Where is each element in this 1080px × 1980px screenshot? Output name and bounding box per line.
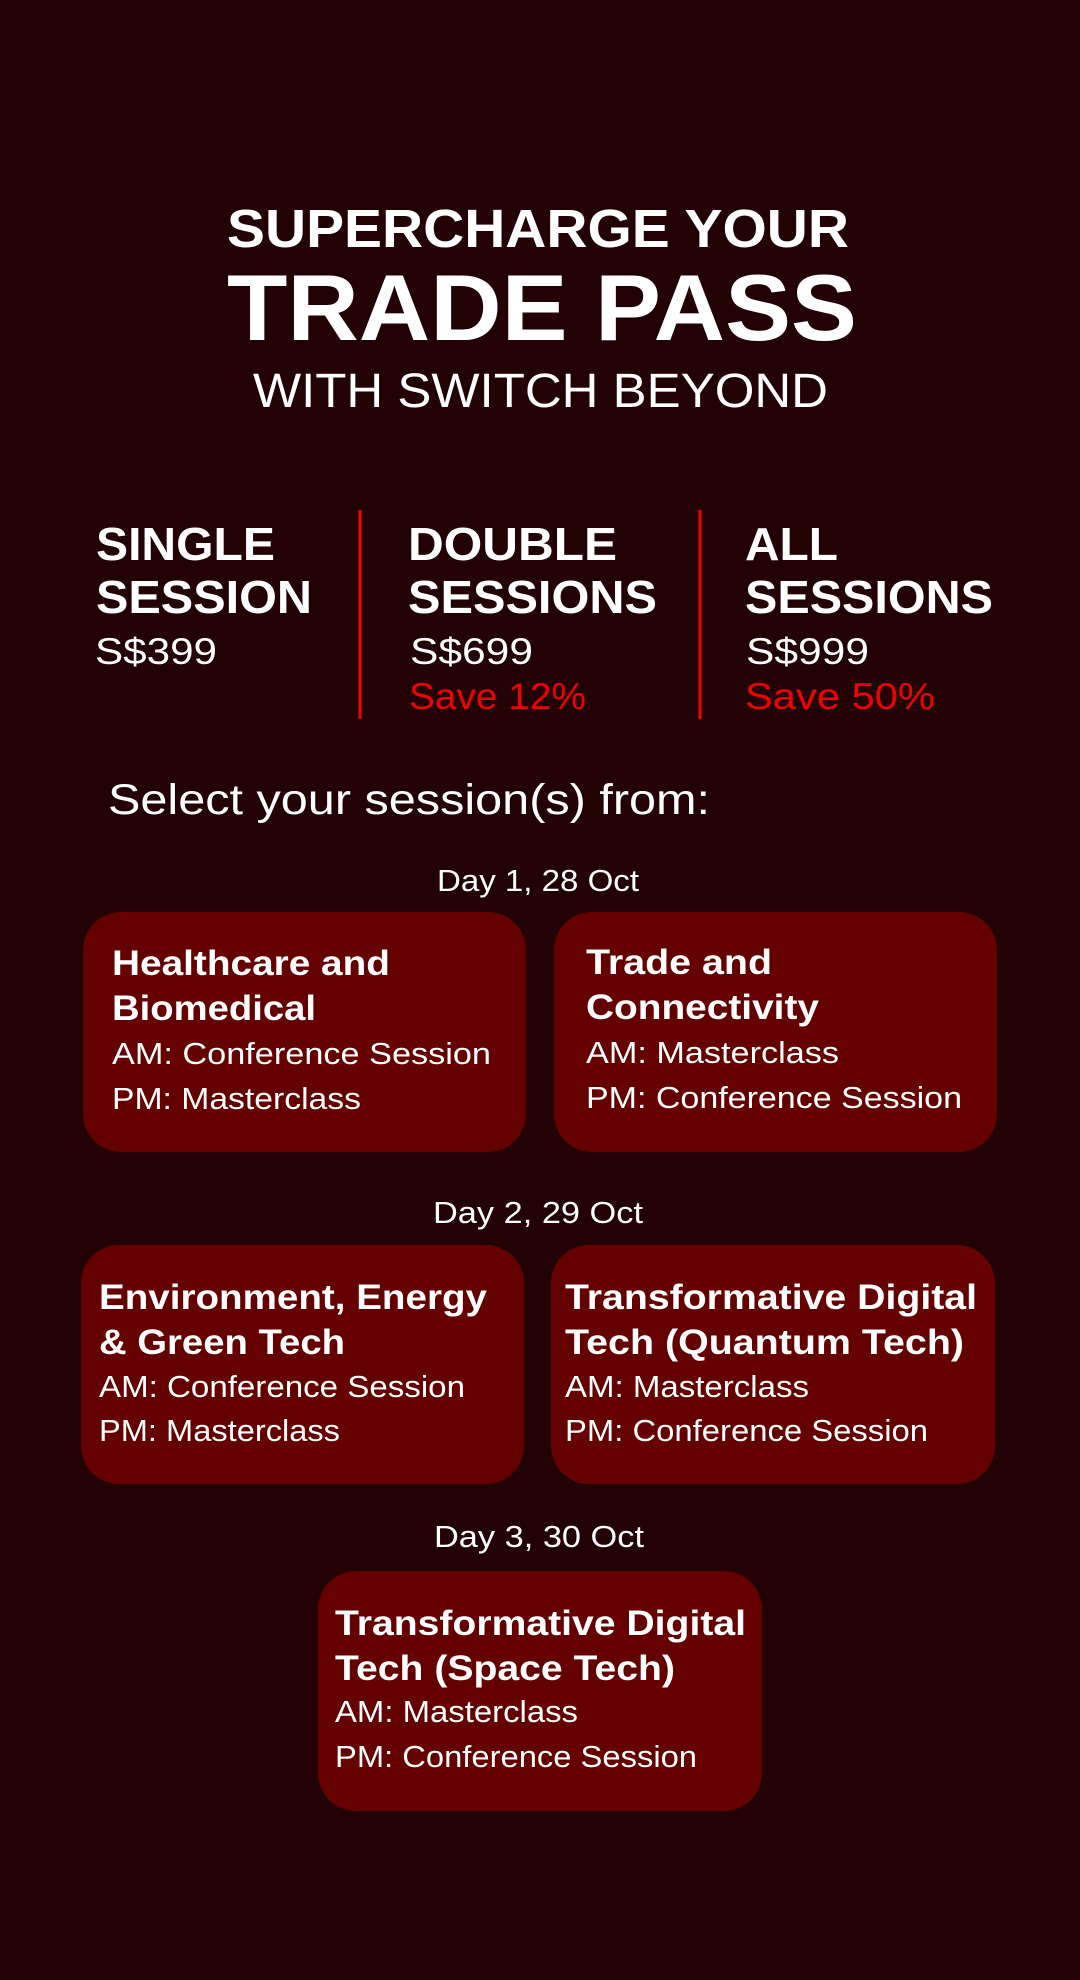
- tier: double sessions: S$699: [410, 631, 533, 672]
- panel: transformative digital tech space: [318, 1571, 762, 1811]
- tier: double sessions: SESSIONS: [408, 571, 657, 623]
- panel: environment, energy and green tech: Environment, Energy: [99, 1278, 488, 1317]
- panel: transformative digital tech quantum: Transformative Digital: [565, 1278, 977, 1317]
- title: [227, 199, 857, 418]
- panel: healthcare and biomedical: Healthcare and: [112, 944, 390, 983]
- panel: healthcare and biomedical: PM: Masterclass: [112, 1081, 361, 1116]
- tier: all sessions: Save 50%: [745, 676, 935, 717]
- panel: transformative digital tech quantum: PM: Conference Session: [565, 1413, 928, 1448]
- panel: transformative digital tech space: PM: Conference Session: [335, 1739, 697, 1774]
- panel: transformative digital tech space: Transformative Digital: [335, 1604, 746, 1643]
- tier: all sessions: S$999: [746, 631, 869, 672]
- panel: trade and connectivity: Connectivity: [586, 988, 820, 1027]
- panel: healthcare and biomedical: AM: Conference Session: [112, 1036, 491, 1071]
- title line: with switch beyond: WITH SWITCH BEYOND: [253, 365, 828, 418]
- panel: environment, energy and green tech: & Green Tech: [99, 1323, 345, 1362]
- tier: single session: [95, 518, 312, 672]
- label: day 3: Day 3, 30 Oct: [434, 1519, 644, 1554]
- tier: single session: SESSION: [96, 571, 312, 623]
- tier: double sessions: Save 12%: [409, 676, 586, 717]
- panel: trade and connectivity: PM: Conference Session: [586, 1080, 962, 1115]
- label: day 2: Day 2, 29 Oct: [433, 1195, 643, 1230]
- panel: trade and connectivity: Trade and: [586, 943, 772, 982]
- panel: transformative digital tech quantum: AM: Masterclass: [565, 1369, 809, 1404]
- panel: healthcare and biomedical: Biomedical: [112, 989, 316, 1028]
- panel: transformative digital tech quantum: [551, 1245, 995, 1484]
- panel: transformative digital tech quantum: Tech (Quantum Tech): [565, 1323, 964, 1362]
- tier: single session: SINGLE: [96, 518, 275, 570]
- panel: transformative digital tech space: Tech (Space Tech): [335, 1649, 675, 1688]
- tier: all sessions: [745, 518, 993, 717]
- title line: supercharge your: SUPERCHARGE YOUR: [227, 199, 849, 259]
- heading: select your sessions: Select your session(s) from:: [108, 776, 710, 824]
- tier: double sessions: [408, 518, 657, 717]
- tier: double sessions: DOUBLE: [408, 518, 617, 570]
- panel: transformative digital tech space: AM: Masterclass: [335, 1694, 578, 1729]
- panel: environment, energy and green tech: [81, 1245, 524, 1484]
- panel: healthcare and biomedical: [83, 912, 526, 1152]
- title line: trade pass: TRADE PASS: [227, 255, 857, 360]
- panel: trade and connectivity: [554, 912, 997, 1152]
- tier: all sessions: ALL: [745, 518, 838, 570]
- divider: tier one and two: [358, 510, 362, 719]
- panel: environment, energy and green tech: PM: Masterclass: [99, 1413, 340, 1448]
- divider: tier two and three: [698, 510, 702, 719]
- tier: single session: S$399: [95, 631, 217, 672]
- panel: environment, energy and green tech: AM: Conference Session: [99, 1369, 465, 1404]
- label: day 1: Day 1, 28 Oct: [437, 863, 639, 898]
- panel: trade and connectivity: AM: Masterclass: [586, 1035, 839, 1070]
- panel: pricing tiers: [95, 510, 993, 719]
- tier: all sessions: SESSIONS: [745, 571, 993, 623]
